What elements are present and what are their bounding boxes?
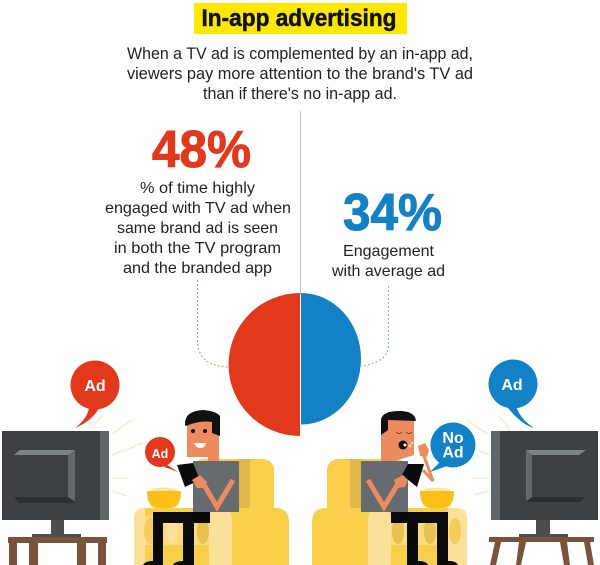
speech bubble: TV Ad: Ad	[84, 378, 106, 395]
light rays	[468, 416, 510, 495]
stat: 48%: in both the TV program	[114, 240, 281, 257]
stat: 34%: 34%	[343, 184, 442, 242]
stat: 48%: and the branded app	[123, 260, 272, 277]
half circle: red 48%	[228, 293, 300, 436]
speech bubble: TV Ad	[488, 360, 538, 428]
title: In-app advertising	[202, 5, 396, 32]
stat: 48%: 48%	[152, 121, 251, 179]
person: viewer with tablet	[143, 410, 239, 565]
icon: television	[2, 431, 109, 565]
right scene	[312, 360, 598, 565]
stat: 48%	[105, 121, 291, 277]
stat: 48%: engaged with TV ad when	[105, 200, 291, 217]
speech bubble: No Ad: No	[442, 430, 464, 447]
stat: 34%: with average ad	[331, 263, 445, 280]
speech bubble: tablet Ad	[145, 437, 178, 472]
icon: armchair	[134, 459, 289, 565]
stat: 48%: % of time highly	[140, 180, 255, 197]
intro text: When a TV ad is complemented by an in-app ad,	[127, 44, 473, 63]
speech bubble: TV Ad: Ad	[501, 377, 523, 394]
icon: popcorn bowl	[420, 488, 454, 508]
speech bubble: No Ad: Ad	[442, 444, 464, 462]
light rays	[91, 416, 143, 496]
stat: 34%: Engagement	[343, 243, 435, 260]
leader line: blue	[361, 286, 388, 366]
leader line: red	[198, 280, 228, 367]
intro text	[127, 44, 473, 103]
icon: television	[489, 431, 598, 565]
intro text: than if there's no in-app ad.	[203, 84, 397, 103]
stat: 34%	[331, 184, 445, 280]
speech bubble: TV Ad	[70, 360, 120, 428]
half circle: blue 34%	[301, 293, 361, 424]
stat: 48%: same brand ad is seen	[117, 220, 278, 237]
speech bubble: No Ad	[430, 422, 476, 472]
intro text: viewers pay more attention to the brand's TV ad	[127, 64, 473, 83]
speech bubble: tablet Ad: Ad	[152, 447, 168, 461]
left scene	[2, 360, 289, 565]
icon: popcorn bowl	[147, 488, 181, 508]
icon: armchair	[312, 459, 467, 565]
person: viewer eating	[361, 411, 458, 565]
